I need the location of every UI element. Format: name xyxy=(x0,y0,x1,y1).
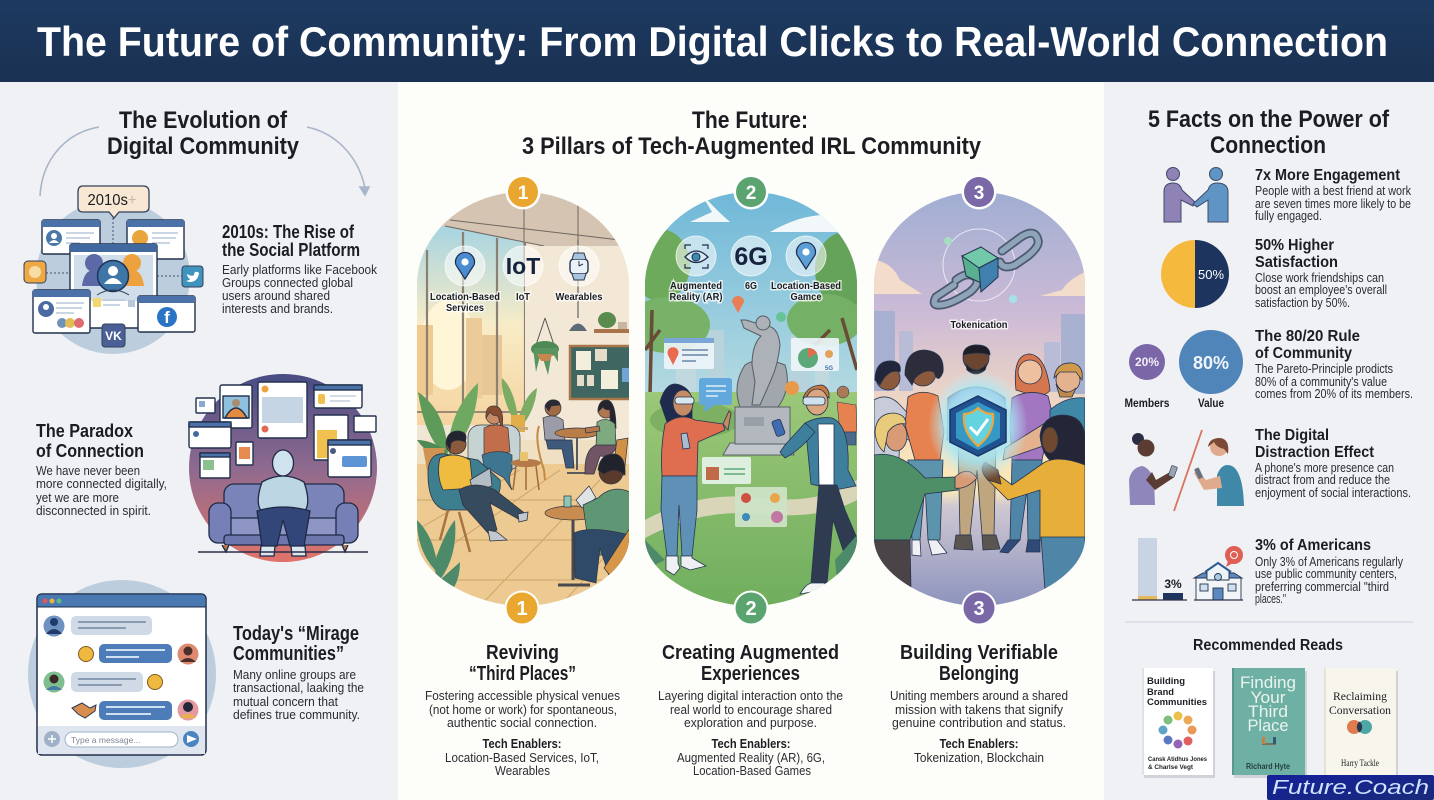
book: reclaiming conversation xyxy=(1324,668,1398,778)
text: paradox of connection: more connected digitally, xyxy=(36,476,167,491)
icon: vk badge xyxy=(102,324,125,347)
text: digital distraction: Distraction Effect xyxy=(1255,444,1375,461)
text: pillar 1: Fostering accessible physical venues xyxy=(425,688,620,703)
text: 80/20 rule xyxy=(1255,328,1413,401)
text: pillar 2: Layering digital interaction onto the xyxy=(658,688,843,703)
text: mirage communities: mutual concern that xyxy=(233,694,338,709)
chart: 80/20 circles: Value xyxy=(1198,396,1224,410)
book: reclaiming conversation: Harry Tackle xyxy=(1341,758,1379,768)
heading: 5 facts: Connection xyxy=(1210,132,1326,159)
text: paradox of connection: of Connection xyxy=(36,441,144,461)
text: digital distraction: The Digital xyxy=(1255,427,1329,444)
tech labels: AR, 6G, games xyxy=(670,236,841,303)
icon: handshake figures xyxy=(1164,168,1228,222)
logo badge: Future.Coach: Future.Coach xyxy=(1272,777,1429,799)
chart: 80/20 circles xyxy=(1124,330,1243,410)
text: pillar 1: “Third Places” xyxy=(469,663,576,685)
tech labels: location, IoT, wearables: Location-Based xyxy=(430,291,500,303)
floating AR panels: 5G xyxy=(825,366,833,372)
panel: three pillars xyxy=(417,107,1086,778)
text: 3% of americans: preferring commercial "third xyxy=(1255,579,1389,594)
tech labels: location, IoT, wearables: IoT xyxy=(516,291,531,303)
icon: lonely person on couch xyxy=(189,374,377,562)
side table xyxy=(511,452,541,490)
text: rise of social platform: Early platforms like Facebook xyxy=(222,262,377,277)
text: pillar 1: Wearables xyxy=(495,763,550,778)
text: 3% of americans: 3% of Americans xyxy=(1255,537,1371,554)
text: digital distraction xyxy=(1255,427,1411,500)
text: mirage communities: Many online groups are xyxy=(233,667,356,682)
person: background figure xyxy=(837,386,857,445)
icon: brain badge xyxy=(24,261,46,283)
text: 7x more engagement xyxy=(1255,167,1411,223)
pillar 3 illustration: verifiable belonging xyxy=(874,192,1086,606)
text: pillar 3: Belonging xyxy=(939,663,1019,685)
text: pillar 2: Experiences xyxy=(701,663,800,685)
icon: two people on phones xyxy=(1129,430,1244,511)
icon: vk badge: VK xyxy=(105,329,122,343)
text: pillar 3: Tokenization, Blockchain xyxy=(914,750,1044,765)
hanging plant xyxy=(531,318,559,375)
badge top 2 xyxy=(734,174,768,210)
text: paradox of connection: disconnected in spirit. xyxy=(36,503,151,518)
book: building brand communities: Communities xyxy=(1147,697,1207,708)
text: rise of social platform: Groups connected global xyxy=(222,275,353,290)
text: pillar 1: (not home or work) for spontaneous, xyxy=(429,702,617,717)
text: pillar 3: Uniting members around a shared xyxy=(890,688,1068,703)
icon: handshake xyxy=(72,703,96,718)
title banner xyxy=(0,0,1434,82)
badge top 2: 2 xyxy=(746,183,756,204)
tech label: tokenication: Tokenication xyxy=(950,319,1008,331)
badge bottom 1: 1 xyxy=(516,598,528,620)
text: 50% higher satisfaction: boost an employee's overall xyxy=(1255,282,1387,297)
text: pillar 3: mission with takens that signify xyxy=(895,702,1063,717)
text: 50% higher satisfaction: satisfaction by 50%. xyxy=(1255,295,1350,310)
person: man with AR visor xyxy=(772,385,862,594)
heading: 5 facts xyxy=(1148,106,1390,159)
person: woman with AR glasses xyxy=(660,384,731,575)
logo badge: Future.Coach xyxy=(1267,775,1434,800)
panel: five facts xyxy=(1124,106,1413,778)
text: 80/20 rule: 80% of a community's value xyxy=(1255,374,1387,389)
text: 80/20 rule: The Pareto-Principle prodicts xyxy=(1255,361,1393,376)
badge top 3 xyxy=(962,174,996,210)
text: pillar 2: Augmented Reality (AR), 6G, xyxy=(677,750,825,765)
text: 50% higher satisfaction: Satisfaction xyxy=(1255,254,1338,271)
badge bottom 2: 2 xyxy=(745,598,757,620)
chart: 80/20 circles: 20% xyxy=(1135,355,1159,369)
badge bottom 3: 3 xyxy=(973,598,985,620)
text: rise of social platform: the Social Platform xyxy=(222,240,360,260)
heading: the future: The Future: xyxy=(692,107,808,134)
chart: 3% bar and community center: 3% xyxy=(1164,577,1182,591)
text: rise of social platform xyxy=(222,222,377,316)
badge bottom 3 xyxy=(962,590,996,626)
text: 80/20 rule: The 80/20 Rule xyxy=(1255,328,1360,345)
tech labels: AR, 6G, games: Augmented xyxy=(670,280,722,292)
text: 7x more engagement: 7x More Engagement xyxy=(1255,167,1401,184)
trees xyxy=(645,230,857,392)
2010s label xyxy=(78,186,149,218)
icon: blockchain link and cube xyxy=(934,229,1038,305)
heading: recommended reads: Recommended Reads xyxy=(1193,637,1343,654)
book: finding your third place: Finding xyxy=(1240,673,1296,692)
front people and hands xyxy=(874,413,1085,590)
icon: facebook: f xyxy=(164,308,170,327)
text: pillar 2: exploration and purpose. xyxy=(684,715,817,730)
text: 80/20 rule: of Community xyxy=(1255,345,1352,362)
text: mirage communities: transactional, laaking the xyxy=(233,680,364,695)
book: finding your third place: Place xyxy=(1248,716,1288,735)
heading: 5 facts: 5 Facts on the Power of xyxy=(1148,106,1390,133)
book: building brand communities xyxy=(1142,668,1215,778)
book: reclaiming conversation: Conversation xyxy=(1329,703,1391,717)
text: pillar 1: authentic social connection. xyxy=(447,715,597,730)
number badges xyxy=(504,174,996,626)
heading: evolution xyxy=(107,107,299,160)
text: 3% of americans: use public community centers, xyxy=(1255,566,1397,581)
left plant xyxy=(417,383,478,470)
text: rise of social platform: 2010s: The Rise of xyxy=(222,222,355,242)
text: 50% higher satisfaction: 50% Higher xyxy=(1255,237,1334,254)
2010s label: 2010s+ xyxy=(88,192,136,209)
text: 3% of americans: places." xyxy=(1255,591,1286,606)
text: pillar 1: Reviving xyxy=(486,642,559,664)
book: finding your third place xyxy=(1232,668,1307,778)
text: 50% higher satisfaction: Close work friendships can xyxy=(1255,270,1384,285)
text: 3% of americans: Only 3% of Americans regularly xyxy=(1255,554,1403,569)
book: reclaiming conversation: Reclaiming xyxy=(1333,689,1387,703)
book: building brand communities: Brand xyxy=(1147,687,1174,698)
text: paradox of connection xyxy=(36,421,167,518)
icon: 2010s social platform network xyxy=(24,186,203,354)
pillar 2 illustration: augmented park xyxy=(645,193,857,605)
person: woman on sofa xyxy=(468,406,520,490)
people at round table xyxy=(537,400,628,480)
tech labels: AR, 6G, games: Location-Based xyxy=(771,280,841,292)
panel: evolution of digital community xyxy=(24,107,377,768)
tech labels: AR, 6G, games: Reality (AR) xyxy=(670,291,722,303)
text: pillar 3: Tech Enablers: xyxy=(940,736,1018,751)
book: finding your third place: Your xyxy=(1250,688,1286,707)
book: finding your third place: Richard Hyte xyxy=(1246,762,1290,771)
book: building brand communities: Cansk Atidhus Jones xyxy=(1148,756,1207,763)
icon: glowing badge xyxy=(950,396,1006,456)
pillar 1 illustration: third place cafe xyxy=(417,192,640,606)
text: pillar 1: Location-Based Services, IoT, xyxy=(445,750,599,765)
chart: 80/20 circles: 80% xyxy=(1193,353,1229,373)
tech labels: AR, 6G, games: 6G xyxy=(745,280,757,292)
text: pillar 2: Tech Enablers: xyxy=(712,736,790,751)
tech labels: location, IoT, wearables: Services xyxy=(446,302,484,314)
text: paradox of connection: yet we are more xyxy=(36,490,119,505)
book: building brand communities: Building xyxy=(1147,676,1185,687)
heading: the future: 3 Pillars of Tech-Augmented IRL Community xyxy=(522,133,981,160)
text: rise of social platform: users around shared xyxy=(222,288,330,303)
back row people xyxy=(874,345,1085,556)
text: paradox of connection: The Paradox xyxy=(36,421,133,441)
text: pillar 3: Building Verifiable xyxy=(900,642,1058,664)
text: pillar 1: Tech Enablers: xyxy=(482,736,562,751)
text: pillar 3: genuine contribution and status. xyxy=(892,715,1066,730)
text: rise of social platform: interests and brands. xyxy=(222,301,333,316)
text: pillar 1 xyxy=(425,642,620,778)
hanging lamp and shelf xyxy=(569,240,629,333)
heading: evolution: Digital Community xyxy=(107,133,299,160)
tech labels: location, IoT, wearables xyxy=(430,246,603,314)
plant behind xyxy=(502,378,537,432)
icon: facebook xyxy=(157,307,177,327)
heading: the future xyxy=(522,107,981,160)
badge top 1: 1 xyxy=(518,183,529,204)
text: pillar 2 xyxy=(658,642,843,778)
chart: 50% pie: 50% xyxy=(1198,267,1224,282)
icon: chat window mirage communities: Type a message... xyxy=(71,735,140,745)
tech labels: location, IoT, wearables: Wearables xyxy=(556,291,603,303)
icon: chat window mirage communities xyxy=(28,580,216,768)
chart: 3% bar and community center xyxy=(1132,538,1243,600)
text: mirage communities: defines true community. xyxy=(233,707,360,722)
heading: evolution: The Evolution of xyxy=(119,107,288,134)
text: mirage communities: Today's “Mirage xyxy=(233,623,359,645)
icon: twitter badge xyxy=(182,266,203,287)
person: man with green sweater xyxy=(545,454,630,590)
text: pillar 3 xyxy=(890,642,1068,765)
badge bottom 2 xyxy=(734,590,768,626)
person: man with yellow shirt on teal chair xyxy=(428,431,528,552)
text: pillar 2: Location-Based Games xyxy=(693,763,811,778)
tech labels: location, IoT, wearables: IoT xyxy=(506,253,540,279)
text: pillar 2: real world to encourage shared xyxy=(670,702,832,717)
chart: 80/20 circles: Members xyxy=(1124,396,1170,410)
text: paradox of connection: We have never been xyxy=(36,463,140,478)
text: digital distraction: A phone's more presence can xyxy=(1255,460,1394,475)
arrow: curved timeline arcs xyxy=(40,127,369,196)
book: building brand communities: & Charlse Vegt xyxy=(1148,764,1194,771)
badge top 1 xyxy=(506,174,540,210)
chart: 50% pie xyxy=(1161,240,1229,308)
tech labels: AR, 6G, games: Gamce xyxy=(790,291,822,303)
statue on pedestal xyxy=(723,316,794,455)
icon: community center building xyxy=(1194,563,1242,600)
floating AR panels xyxy=(664,296,839,527)
notice board xyxy=(570,346,640,399)
badge bottom 1 xyxy=(504,590,540,626)
tech labels: AR, 6G, games: 6G xyxy=(734,243,768,271)
text: 7x more engagement: fully engaged. xyxy=(1255,208,1322,223)
text: digital distraction: distract from and reduce the xyxy=(1255,472,1390,487)
text: mirage communities xyxy=(233,623,364,722)
text: pillar 2: Creating Augmented xyxy=(662,642,839,664)
badge top 3: 3 xyxy=(974,183,984,204)
book: finding your third place: Third xyxy=(1248,702,1288,721)
text: 3% of americans xyxy=(1255,537,1403,606)
text: 50% higher satisfaction xyxy=(1255,237,1387,310)
text: mirage communities: Communities” xyxy=(233,643,344,665)
